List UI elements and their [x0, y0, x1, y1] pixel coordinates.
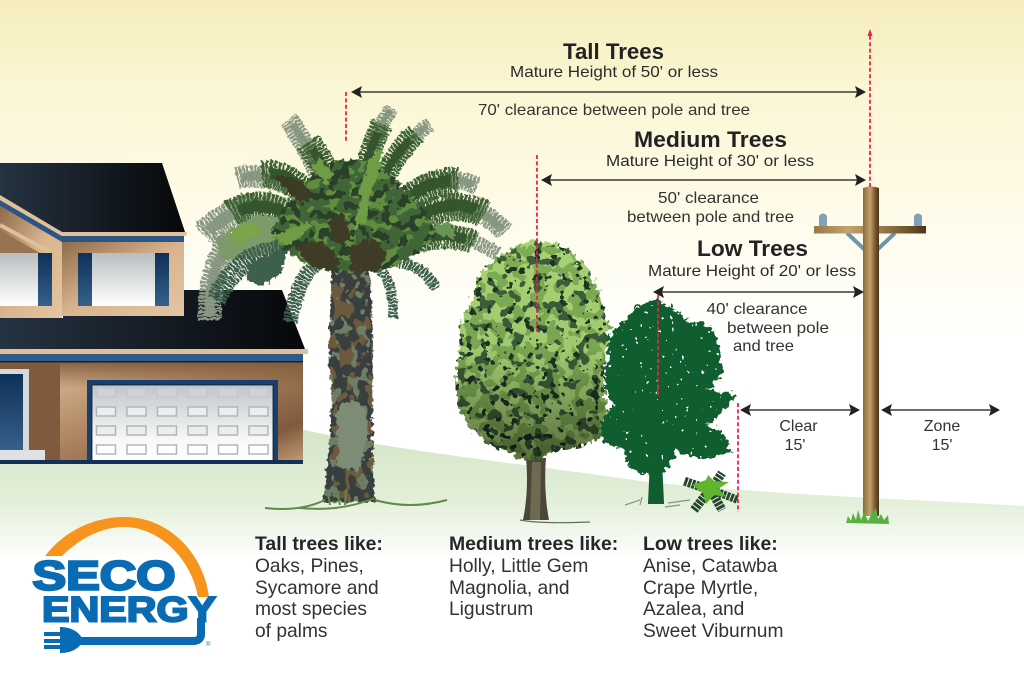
- illustration: low tree: [601, 300, 735, 507]
- upper roof: [0, 163, 185, 232]
- braces: [847, 233, 895, 250]
- palm trunk: [323, 270, 376, 502]
- medium trees list: Holly, Little Gem: [449, 556, 588, 577]
- low trees clearance arrow: [653, 286, 864, 298]
- inner gable trim: [0, 225, 50, 252]
- low tree trunk: [640, 430, 672, 503]
- low trees heading: Mature Height of 20' or less: [648, 263, 856, 280]
- medium trees list: Ligustrum: [449, 599, 533, 620]
- utility pole: [814, 186, 926, 524]
- medium tree crown: [456, 240, 610, 461]
- low trees clearance text: and tree: [733, 338, 794, 355]
- zone label: 15': [932, 437, 952, 454]
- gable trim: [0, 195, 187, 236]
- low trees list: Anise, Catawba: [643, 556, 778, 577]
- upper right right shutter: [155, 253, 169, 306]
- right insulator: [914, 214, 922, 226]
- upper wall: [61, 242, 184, 316]
- pole shaft: [863, 186, 879, 516]
- tall trees heading: [510, 39, 718, 81]
- gable wall: [0, 206, 62, 318]
- medium trees heading: Medium Trees: [634, 127, 787, 152]
- medium trees heading: [606, 127, 814, 170]
- medium tree trunk: [523, 458, 549, 520]
- palm brown base: [272, 175, 388, 272]
- low trees heading: [648, 236, 856, 280]
- logo word SECO: SECO: [32, 552, 176, 598]
- lower wall: [0, 361, 303, 461]
- low trees list: Crape Myrtle,: [643, 578, 758, 599]
- fascia: [0, 349, 308, 354]
- inner gable: [0, 230, 40, 253]
- tall trees list: of palms: [255, 621, 328, 642]
- clear zone arrow: [740, 404, 860, 416]
- low trees list: [643, 533, 783, 642]
- medium trees clearance text: 50' clearance: [658, 190, 759, 207]
- low trees list: Azalea, and: [643, 599, 744, 620]
- left insulator: [819, 214, 827, 226]
- illustration: medium tree: [456, 240, 610, 523]
- medium trees list: Medium trees like:: [449, 533, 618, 555]
- low tree crown: [601, 300, 735, 475]
- door: [0, 374, 23, 450]
- tall trees clearance text: 70' clearance between pole and tree: [478, 102, 750, 119]
- tall trees heading: Mature Height of 50' or less: [510, 64, 718, 81]
- icon: fern shrub: [684, 473, 738, 510]
- logo arc: [45, 517, 209, 597]
- logo: SECO Energy: [32, 517, 216, 653]
- garage frame: [87, 380, 278, 461]
- upper right left shutter: [78, 253, 92, 306]
- palm crown: [272, 160, 438, 272]
- tall trees list: Sycamore and: [255, 578, 379, 599]
- upper left shutter: [38, 253, 52, 306]
- red dashed guides: [346, 29, 872, 512]
- low trees clearance text: 40' clearance: [706, 301, 808, 318]
- low tree grass: [625, 497, 690, 507]
- door step: [0, 450, 45, 460]
- door frame: [0, 369, 29, 451]
- crossarm: [814, 226, 926, 234]
- tall trees heading: Tall Trees: [563, 39, 664, 64]
- illustration: tall palm tree: [204, 108, 505, 509]
- frond solid spines: [240, 132, 476, 260]
- logo plug: [44, 627, 82, 653]
- medium trees heading: Mature Height of 30' or less: [606, 153, 814, 170]
- low trees list: Sweet Viburnum: [643, 621, 783, 642]
- clear label: [779, 418, 818, 454]
- blue band: [0, 354, 303, 361]
- foundation: [0, 460, 303, 464]
- medium trees list: Magnolia, and: [449, 578, 570, 599]
- illustration: house: [0, 163, 308, 464]
- clear label: 15': [785, 437, 805, 454]
- low trees heading: Low Trees: [697, 236, 808, 261]
- garage door: [92, 385, 273, 461]
- garage wall: [60, 363, 303, 461]
- tall trees list: most species: [255, 599, 367, 620]
- ground slope: [0, 425, 1024, 691]
- frond mid-green left mass: [215, 214, 300, 286]
- upper right window: [92, 253, 155, 306]
- light frond highlights: [272, 146, 456, 246]
- clear label: Clear: [779, 418, 818, 435]
- tall trees clearance arrow: [351, 86, 866, 98]
- medium trees clearance arrow: [541, 174, 866, 186]
- fronds grey tips: [204, 108, 505, 320]
- grey frond spines: [208, 111, 501, 316]
- upper left window: [0, 253, 38, 306]
- fern bright centre: [692, 475, 729, 504]
- palm root grass: [265, 490, 447, 509]
- zone label: [924, 418, 960, 454]
- zone label: Zone: [924, 418, 960, 435]
- tall trees list: [255, 533, 383, 642]
- medium trees list: [449, 533, 618, 620]
- zone arrow: [881, 404, 1000, 416]
- medium trees clearance text: between pole and tree: [627, 209, 794, 226]
- hanging fronds: [216, 250, 436, 322]
- lower roof: [0, 290, 305, 349]
- trunk lower pale patch: [337, 401, 367, 472]
- gable blue band: [0, 200, 184, 242]
- medium trees clearance text: [627, 190, 794, 226]
- low trees clearance text: [706, 301, 829, 355]
- fronds dark green: [232, 124, 484, 260]
- low trees clearance text: between pole: [727, 320, 829, 337]
- grass tuft: [846, 508, 889, 524]
- garage wall top shade: [60, 363, 303, 389]
- registered mark: ®: [206, 641, 211, 648]
- logo word ENERGY: ENERGY: [42, 590, 216, 630]
- tall trees list: Tall trees like:: [255, 533, 383, 555]
- low trees list: Low trees like:: [643, 533, 778, 555]
- medium tree root shadow: [520, 520, 590, 523]
- logo plug cord: [80, 618, 201, 641]
- tall trees list: Oaks, Pines,: [255, 556, 364, 577]
